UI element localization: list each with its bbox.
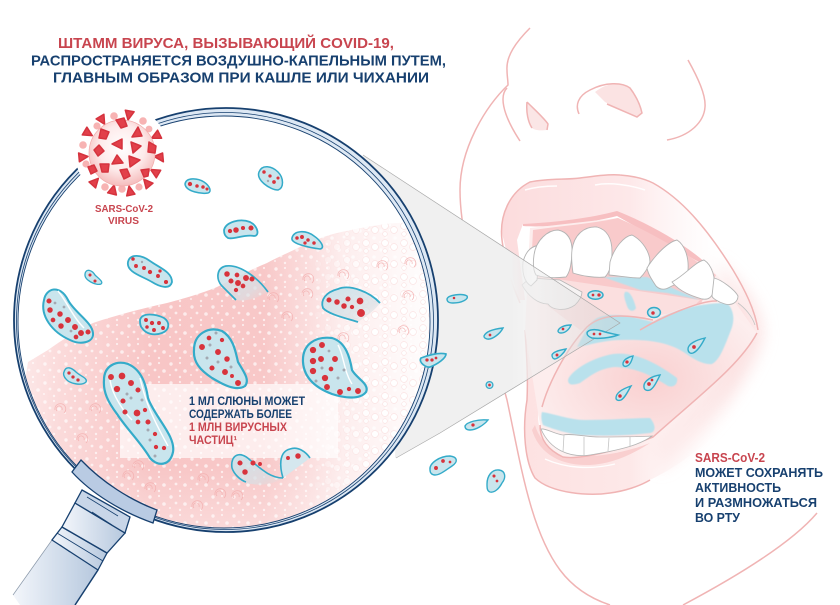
droplet: large centre	[194, 330, 247, 388]
callout: virus in mouth	[695, 450, 823, 525]
haze around mouth corner	[650, 260, 762, 470]
face outline	[460, 28, 817, 605]
mouth interior	[525, 218, 757, 458]
handle taper	[62, 503, 125, 553]
text box: saliva note	[120, 384, 338, 458]
label: virus name: VIRUS	[108, 215, 139, 227]
outer spikes	[79, 110, 163, 196]
mouth lower edge	[540, 333, 757, 458]
droplet: sinking centre	[218, 266, 268, 301]
nose wing	[667, 60, 705, 140]
droplet: large right	[303, 338, 367, 398]
lower lip	[525, 330, 757, 494]
title: РАСПРОСТРАНЯЕТСЯ ВОЗДУШНО-КАПЕЛЬНЫМ ПУТЕМ,	[31, 52, 446, 70]
text box: saliva note: ЧАСТИЦ¹	[189, 435, 237, 447]
lens rim	[14, 108, 438, 532]
upper teeth	[523, 245, 540, 286]
lower teeth	[541, 429, 652, 456]
droplet: large left	[43, 289, 93, 343]
handle mid ring	[52, 527, 107, 570]
label: virus name: SARS-CoV-2	[95, 203, 153, 215]
saliva surface	[26, 222, 430, 528]
title	[31, 34, 446, 86]
magnifying glass lens	[0, 108, 440, 540]
droplets inside lens	[43, 167, 446, 485]
upper lip	[502, 175, 757, 325]
label: virus name	[95, 203, 153, 227]
upper molars	[522, 278, 582, 309]
droplets in flight	[430, 295, 505, 492]
callout: virus in mouth: ВО РТУ	[695, 510, 741, 525]
text box: saliva note: СОДЕРЖАТЬ БОЛЕЕ	[189, 409, 292, 421]
title: ШТАММ ВИРУСА, ВЫЗЫВАЮЩИЙ COVID-19,	[58, 34, 394, 52]
title: ГЛАВНЫМ ОБРАЗОМ ПРИ КАШЛЕ ИЛИ ЧИХАНИИ	[53, 70, 429, 86]
handle neck band	[75, 490, 130, 533]
pink spikes	[79, 112, 152, 193]
gums	[530, 218, 716, 305]
blue saliva patches	[541, 277, 733, 436]
zoom wedge from lens to mouth	[363, 155, 620, 458]
text box: saliva note: 1 МЛН ВИРУСНЫХ	[189, 422, 287, 434]
callout: virus in mouth: И РАЗМНОЖАТЬСЯ	[695, 495, 817, 510]
tongue outline	[542, 301, 717, 407]
magnifying glass collar	[72, 460, 157, 523]
nose crease	[503, 88, 520, 141]
text box: saliva note: 1 МЛ СЛЮНЫ МОЖЕТ	[189, 396, 305, 408]
right nostril	[595, 84, 642, 117]
droplets: medium	[224, 220, 257, 238]
magnifying glass handle	[13, 490, 130, 605]
callout: virus in mouth: SARS-CoV-2	[695, 450, 765, 465]
left nostril	[527, 102, 548, 130]
callout: virus in mouth: МОЖЕТ СОХРАНЯТЬ	[695, 465, 823, 480]
mouth	[502, 175, 762, 494]
droplet: sinking right	[322, 287, 380, 322]
droplets in mouth	[552, 291, 705, 400]
droplet: large centre-left	[104, 363, 173, 464]
droplets: paired bottom	[232, 448, 310, 485]
callout: virus in mouth: АКТИВНОСТЬ	[695, 480, 781, 495]
surface spikes	[88, 118, 156, 179]
tongue	[540, 301, 757, 458]
handle body	[13, 540, 98, 605]
icon: coronavirus	[75, 106, 169, 200]
